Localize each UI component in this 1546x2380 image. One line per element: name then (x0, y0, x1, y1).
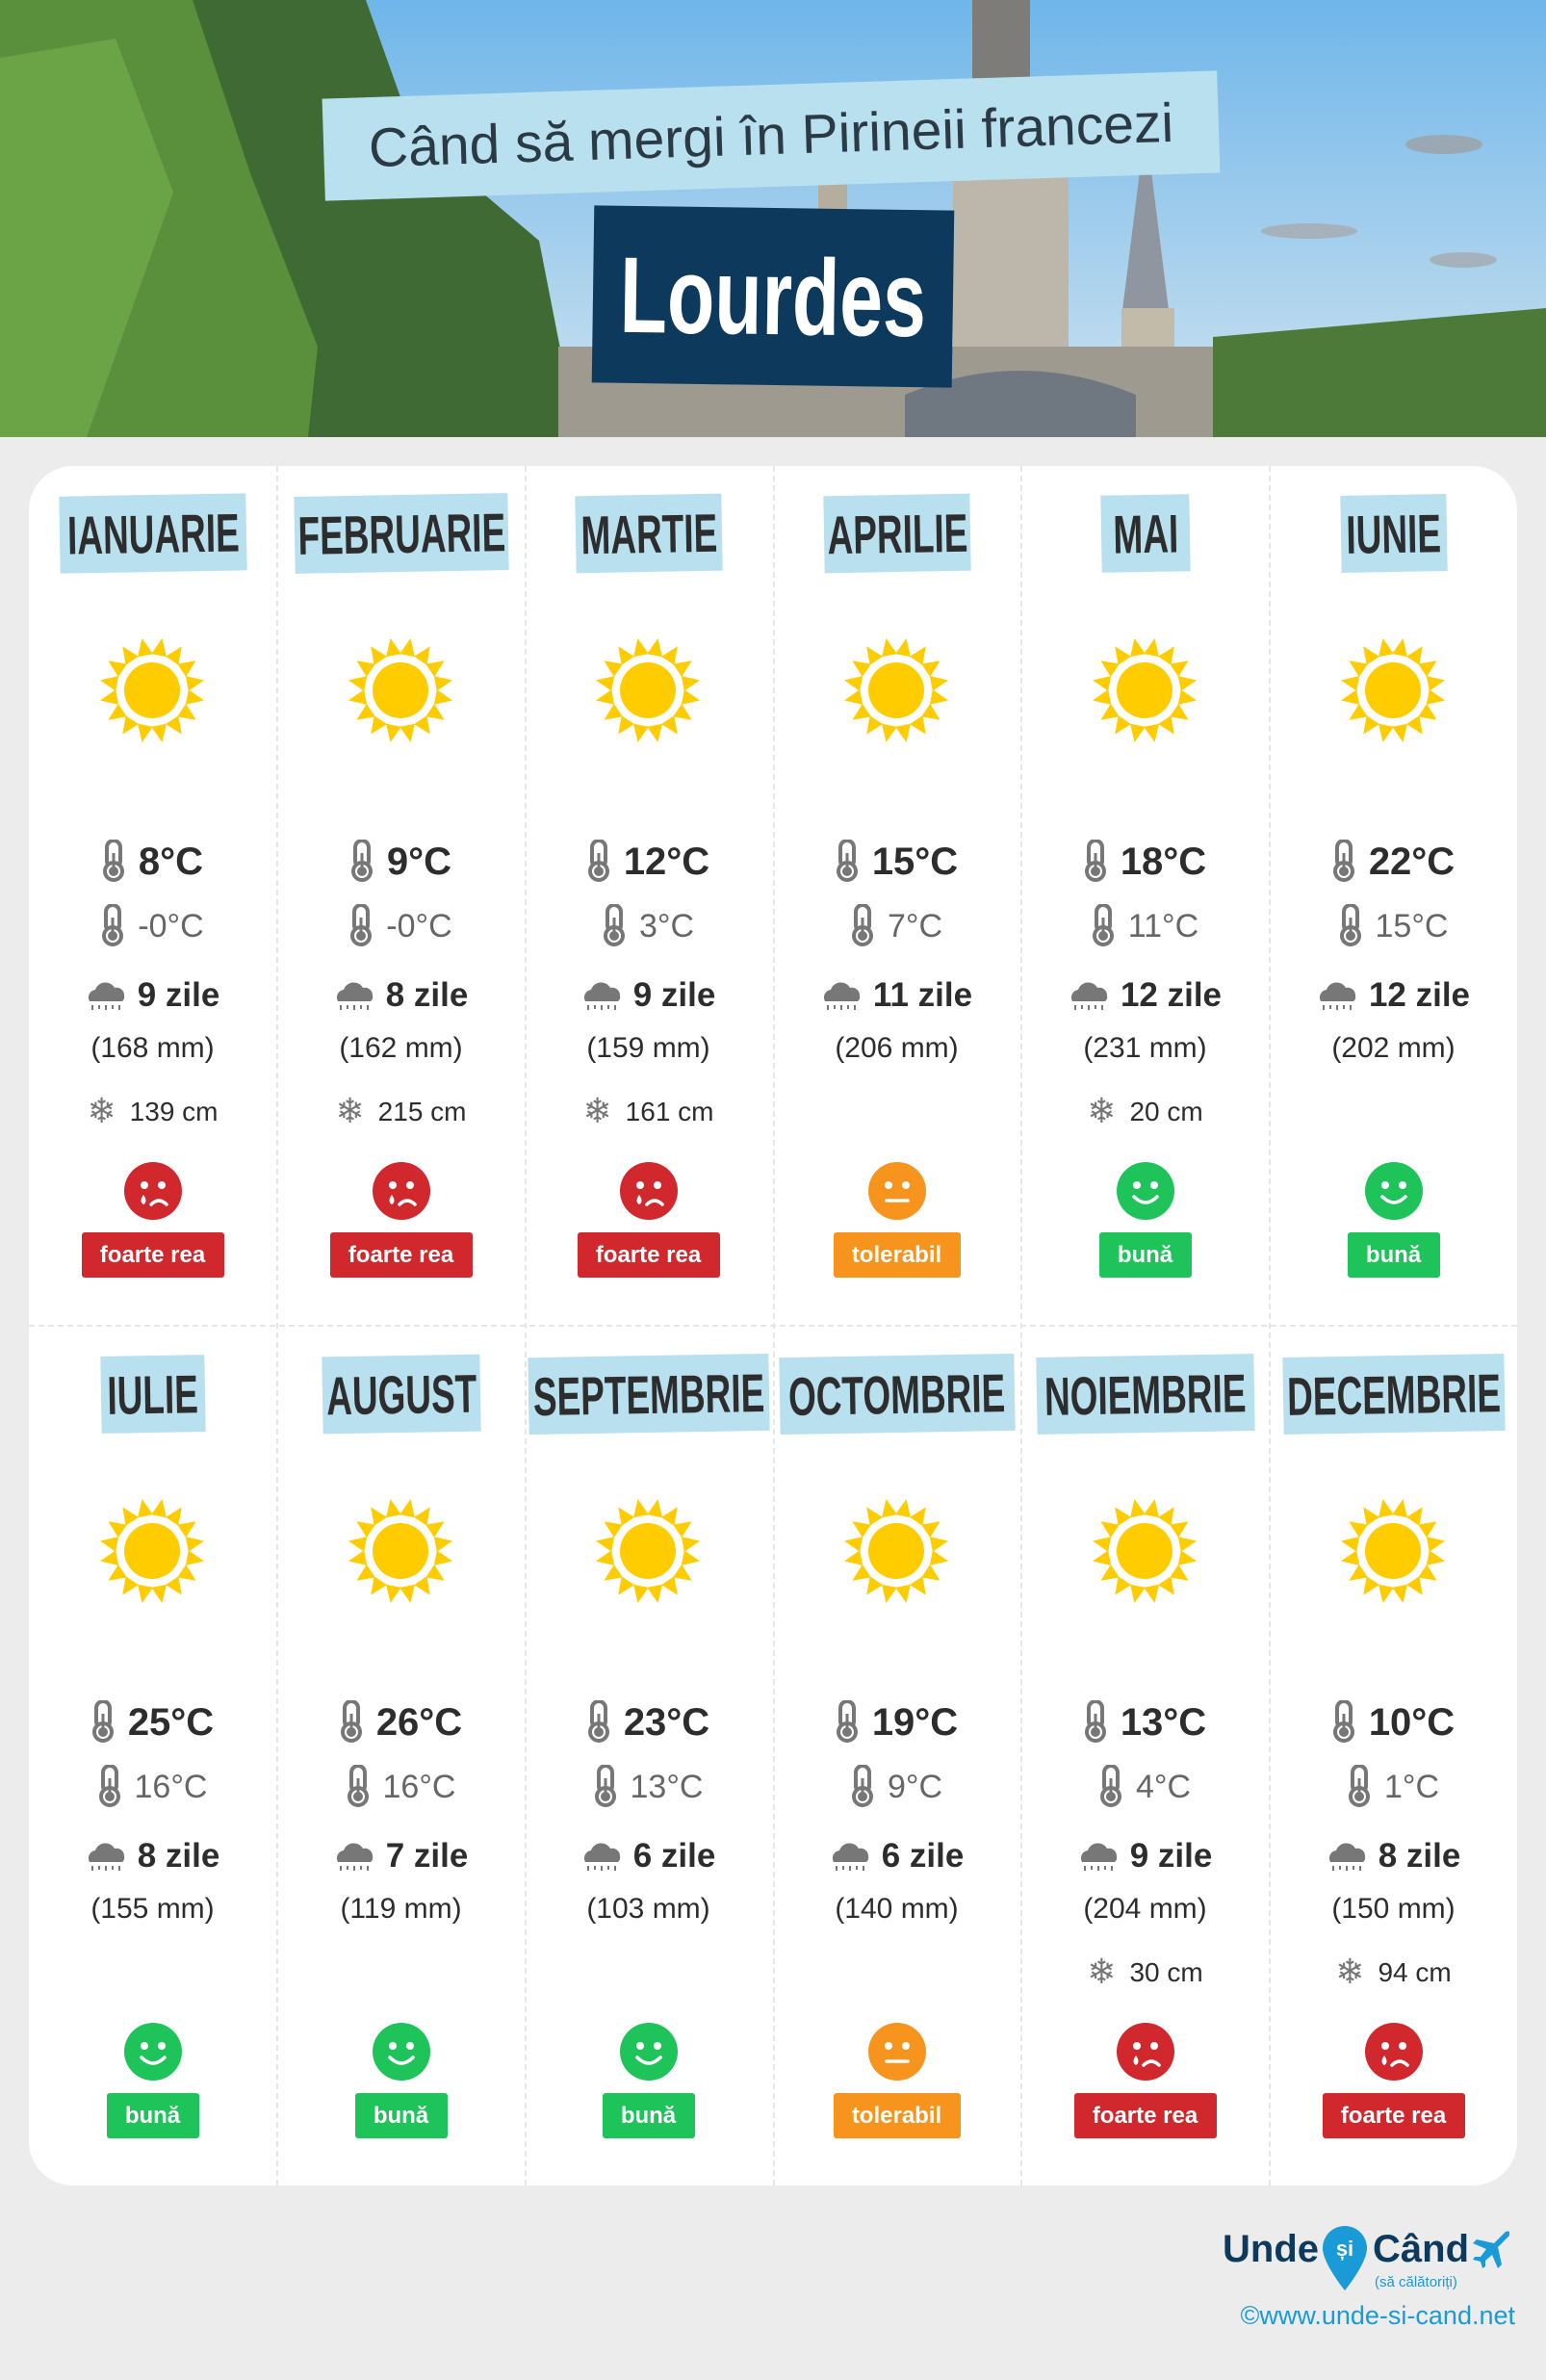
column: Iulie: 8 zile (138, 1837, 219, 1875)
column: Iunie: 15°C (1376, 907, 1448, 944)
title: subtitle banner (322, 70, 1220, 201)
column: Septembrie: 6 zile (633, 1837, 715, 1875)
column: Decembrie: 8 zile (1379, 1837, 1460, 1875)
column: Februarie: 215 cm (378, 1096, 466, 1126)
column: Decembrie: 94 cm (1378, 1956, 1452, 1987)
column: Martie: 9 zile (633, 976, 715, 1014)
column: Mai: MAI (1112, 503, 1178, 564)
column: August: bună (374, 2103, 428, 2128)
column: Noiembrie: ❄ (1087, 1953, 1116, 1992)
column: Octombrie: (140 mm) (835, 1893, 959, 1925)
column: Noiembrie: 30 cm (1129, 1956, 1203, 1987)
logo: Unde si Cand: Când (1373, 2228, 1469, 2270)
logo: Unde si Cand: (să călătoriți) (1375, 2274, 1457, 2290)
column: Mai: 11°C (1128, 907, 1198, 944)
column: Iulie: (155 mm) (90, 1893, 215, 1925)
logo: Unde si Cand: Unde (1223, 2228, 1319, 2270)
column: Octombrie: tolerabil (852, 2103, 941, 2128)
panel: calendar card (29, 466, 1517, 2186)
column: Septembrie: bună (621, 2103, 676, 2128)
column: Ianuarie: 139 cm (130, 1096, 218, 1126)
header photo (0, 0, 1546, 437)
column: Februarie: 9°C (387, 840, 451, 882)
column: Mai: 18°C (1121, 840, 1206, 882)
column: Mai: 20 cm (1129, 1096, 1203, 1126)
column: Decembrie: foarte rea (1341, 2103, 1446, 2128)
column: Februarie: (162 mm) (339, 1032, 463, 1064)
column: Noiembrie: NOIEMBRIE (1044, 1362, 1247, 1426)
column: Iunie (1319, 494, 1470, 1278)
column: Noiembrie: 13°C (1121, 1700, 1206, 1743)
column: Martie: 12°C (624, 840, 709, 882)
column: Decembrie: (150 mm) (1331, 1893, 1456, 1925)
column: Septembrie: 23°C (624, 1700, 709, 1743)
column: Decembrie: 1°C (1384, 1768, 1439, 1804)
column: Iunie: (202 mm) (1331, 1032, 1456, 1064)
column: August: AUGUST (325, 1362, 477, 1426)
column: Aprilie: 7°C (888, 907, 942, 944)
column: Septembrie: (103 mm) (586, 1893, 710, 1925)
title: subtitle banner: Când să mergi în Pirineii francezi (368, 92, 1174, 179)
column: August: (119 mm) (340, 1893, 462, 1925)
column: Martie: (159 mm) (586, 1032, 710, 1064)
column: Iunie: bună (1366, 1242, 1421, 1267)
column: Februarie: ❄ (335, 1092, 365, 1131)
column: August: 7 zile (386, 1837, 468, 1875)
column: Martie: ❄ (583, 1092, 612, 1131)
column: Februarie: 8 zile (386, 976, 468, 1014)
column: Ianuarie: (168 mm) (90, 1032, 215, 1064)
column: Ianuarie (59, 493, 247, 1278)
column: Martie: 161 cm (626, 1096, 714, 1126)
column: Aprilie: APRILIE (826, 502, 967, 565)
column: Iulie (89, 1355, 219, 2138)
column: Octombrie: 19°C (872, 1700, 958, 1743)
logo: Unde si Cand: și (1336, 2237, 1353, 2261)
column: Martie (575, 493, 723, 1278)
column: Ianuarie: foarte rea (100, 1242, 205, 1267)
column: August: 26°C (376, 1700, 462, 1743)
column: Noiembrie: 9 zile (1130, 1837, 1212, 1875)
column: Iulie: bună (125, 2103, 180, 2128)
column: Noiembrie: (204 mm) (1083, 1893, 1207, 1925)
column: Iunie: IUNIE (1346, 503, 1441, 564)
column: Mai (1070, 494, 1222, 1278)
column: Decembrie: ❄ (1335, 1953, 1364, 1992)
column: Aprilie (823, 493, 972, 1278)
column: Decembrie (1282, 1354, 1506, 2138)
logo: Unde si Cand (1223, 2226, 1509, 2290)
column: Iulie: 25°C (128, 1700, 214, 1743)
column: August: 16°C (383, 1768, 455, 1804)
column: Ianuarie: ❄ (87, 1092, 116, 1131)
column: Mai: 12 zile (1121, 976, 1222, 1014)
footer: website url: ©www.unde-si-cand.net (1240, 2301, 1515, 2330)
column: Mai: ❄ (1087, 1092, 1116, 1131)
column: Iulie: IULIE (107, 1363, 198, 1425)
column: Noiembrie (1036, 1354, 1255, 2138)
column: Iulie: 16°C (135, 1768, 207, 1804)
column: Aprilie: 15°C (872, 840, 958, 882)
column: Iunie: 12 zile (1369, 976, 1470, 1014)
column: Septembrie (528, 1354, 770, 2138)
column: Septembrie: 13°C (631, 1768, 703, 1804)
column: Octombrie: 6 zile (882, 1837, 964, 1875)
column: Ianuarie: IANUARIE (66, 502, 239, 565)
column: Ianuarie: 8°C (139, 840, 203, 882)
column: Aprilie: tolerabil (852, 1242, 941, 1267)
column: Iunie: 22°C (1369, 840, 1455, 882)
column: Octombrie: 9°C (888, 1768, 942, 1804)
column: Octombrie: OCTOMBRIE (787, 1362, 1006, 1426)
column: Februarie (294, 493, 509, 1278)
column: Noiembrie: foarte rea (1093, 2103, 1198, 2128)
column: Septembrie: SEPTEMBRIE (532, 1361, 764, 1427)
column: Octombrie (779, 1354, 1016, 2138)
column: Decembrie: DECEMBRIE (1286, 1362, 1501, 1426)
title: Lourdes (592, 205, 954, 388)
title: Lourdes: Lourdes (619, 234, 927, 359)
column: Februarie: foarte rea (348, 1242, 453, 1267)
column: Martie: MARTIE (580, 502, 717, 565)
column: Februarie: -0°C (386, 907, 452, 944)
column: Aprilie: 11 zile (873, 976, 972, 1014)
column: Noiembrie: 4°C (1136, 1768, 1191, 1804)
column: Februarie: FEBRUARIE (296, 502, 505, 565)
column: August (322, 1354, 481, 2138)
column: Martie: foarte rea (596, 1242, 701, 1267)
column: Aprilie: (206 mm) (835, 1032, 959, 1064)
column: Mai: bună (1118, 1242, 1172, 1267)
column: Ianuarie: 9 zile (138, 976, 219, 1014)
column: Martie: 3°C (639, 907, 694, 944)
column: Mai: (231 mm) (1083, 1032, 1207, 1064)
column: Decembrie: 10°C (1369, 1700, 1455, 1743)
column: Ianuarie: -0°C (138, 907, 204, 944)
